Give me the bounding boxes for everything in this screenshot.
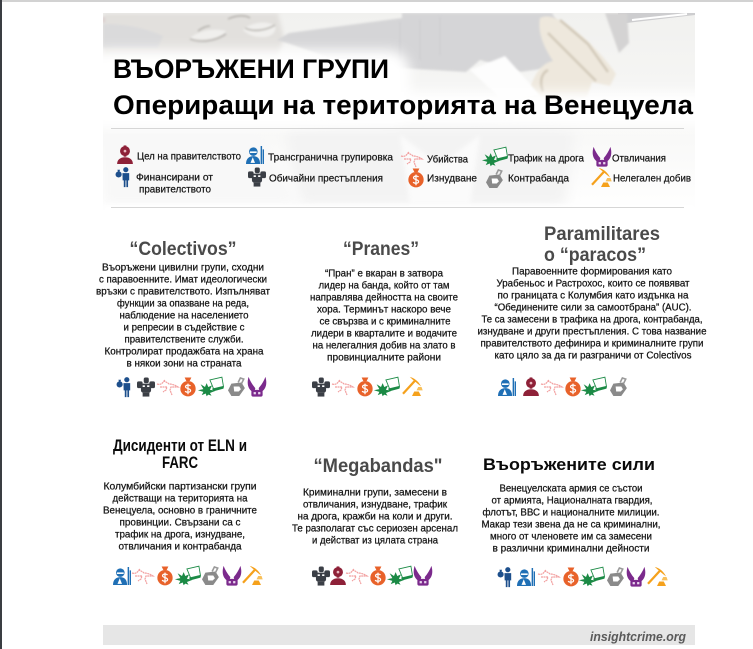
panel: ELN and FARC dissidents: отвличания и контрабанда	[118, 540, 242, 552]
footer bar	[103, 625, 695, 645]
panel: Armed forces: Макар тези звена да не са криминални,	[482, 520, 660, 530]
panel: Paramilitares: Паравоенните формирования като	[512, 266, 672, 278]
hero background image: face, rifle and hand	[103, 13, 695, 202]
panel: Armed forces: Венецуелската армия се състои	[500, 484, 642, 494]
panel: Megabandas: и действат из цялата страна	[312, 536, 438, 546]
panel: Pranes: хора. Терминът наскоро вече	[317, 304, 451, 316]
legend: Цел на правителството	[137, 152, 241, 162]
panel: Paramilitares: правителството дефинира и криминалните групи	[480, 338, 704, 350]
panel: Colectivos: Контролират продажбата на храна	[104, 346, 264, 358]
panel: Paramilitares: изнудване и други престъпления. С това название	[478, 326, 707, 338]
legend: Трансгранична групировка	[268, 152, 393, 164]
panel: Pranes: провинциалните райони	[327, 352, 441, 364]
legend: Трафик на дрога	[508, 152, 584, 164]
legend: Убийства	[427, 154, 468, 166]
panel: Pranes: “Pranes”	[343, 239, 419, 260]
panel: Armed forces: флотът, ВВС и националните милиции.	[482, 506, 660, 518]
panel: ELN and FARC dissidents: провинции. Свързани са с	[120, 518, 240, 528]
panel: Megabandas: Криминални групи, замесени в	[303, 488, 447, 498]
panel: Paramilitares: Paramilitares	[544, 224, 660, 245]
panel: Colectivos: функции за опазване на реда,	[117, 298, 249, 310]
legend: Отвличания	[612, 154, 666, 164]
panel: Colectivos: “Colectivos”	[130, 239, 236, 260]
panel: Pranes	[310, 239, 458, 397]
panel: Armed forces	[482, 455, 668, 587]
title: ВЪОРЪЖЕНИ ГРУПИ	[113, 54, 389, 84]
panel: Colectivos: с паравоенните. Имат идеологически	[99, 274, 267, 286]
panel: Megabandas: “Megabandas"	[314, 456, 442, 477]
panel: Armed forces: Въоръжените сили	[483, 455, 655, 474]
panel: Paramilitares: “Обединените сили за самоотбрана” (AUC).	[494, 302, 692, 314]
panel: Colectivos: връзки с правителството. Изпълняват	[96, 286, 270, 298]
panel: Armed forces: много от членовете им са замесени	[490, 532, 652, 542]
panel: Paramilitares: по границата с Колумбия като издънка на	[498, 290, 689, 302]
legend: Финансирани от	[136, 172, 213, 184]
panel: Megabandas	[292, 456, 458, 586]
legend: Контрабанда	[508, 172, 569, 184]
panel: ELN and FARC dissidents: Колумбийски партизански групи	[104, 480, 256, 492]
legend: правителството	[139, 184, 211, 196]
panel: Pranes: се свързва и с криминалните	[320, 316, 451, 328]
panel: Colectivos: в някои зони на страната	[126, 358, 242, 370]
panel: Megabandas: на дрога, кражби на коли и други.	[298, 510, 452, 522]
panel: Paramilitares: Урабеньос и Растрохос, които се появяват	[496, 278, 690, 290]
panel: Megabandas: отвличания, изнудване, трафик	[303, 498, 448, 510]
panel: Paramilitares: Те са замесени в трафика на дрога, контрабанда,	[482, 314, 702, 326]
panel: Paramilitares: o “paracos”	[544, 245, 646, 266]
panel: Colectivos	[96, 239, 270, 397]
title	[113, 54, 694, 120]
panel: ELN and FARC dissidents: действащи на територията на	[112, 494, 248, 504]
panel: Paramilitares: като цяло за да ги разграничи от Colectivos	[494, 350, 692, 362]
panel: Paramilitares	[478, 224, 707, 396]
panel: Armed forces: в различни криминални дейности	[492, 544, 650, 554]
legend: Нелегален добив	[613, 172, 691, 184]
legend: Обичайни престъпления	[269, 172, 383, 184]
title: Опериращи на територията на Венецуела	[113, 90, 694, 120]
panel: Pranes: “Пран” е вкаран в затвора	[325, 268, 443, 280]
panel: Colectivos: Въоръжени цивилни групи, сходни	[102, 262, 264, 274]
panel: Colectivos: правителствените служби.	[124, 334, 244, 346]
panel: ELN and FARC dissidents: FARC	[162, 453, 198, 472]
panel: Megabandas: Те разполагат със сериозен арсенал	[292, 524, 458, 534]
panel: Armed forces: от армията, Националната гвардия,	[492, 496, 652, 506]
panel: Pranes: лидер на банда, който от там	[318, 280, 450, 292]
panel: Pranes: лидери в кварталите и водачите	[311, 328, 457, 340]
panel: Pranes: на нелегалния добив на злато в	[312, 340, 456, 352]
panel: ELN and FARC dissidents: трафик на дрога, изнудване,	[115, 528, 245, 540]
panel: ELN and FARC dissidents: Венецуела, основно в граничните	[103, 506, 257, 516]
footer bar: insightcrime.org	[590, 629, 686, 644]
panel: ELN and FARC dissidents	[103, 436, 263, 586]
legend: Изнудване	[427, 174, 477, 184]
panel: Pranes: направлява дейността на своите	[310, 292, 458, 304]
legend	[116, 145, 691, 196]
panel: Colectivos: и репресии в съдействие с	[124, 322, 244, 334]
panel: ELN and FARC dissidents: Дисиденти от ELN и	[113, 436, 247, 455]
panel: Colectivos: наблюдение на населението	[120, 310, 249, 322]
